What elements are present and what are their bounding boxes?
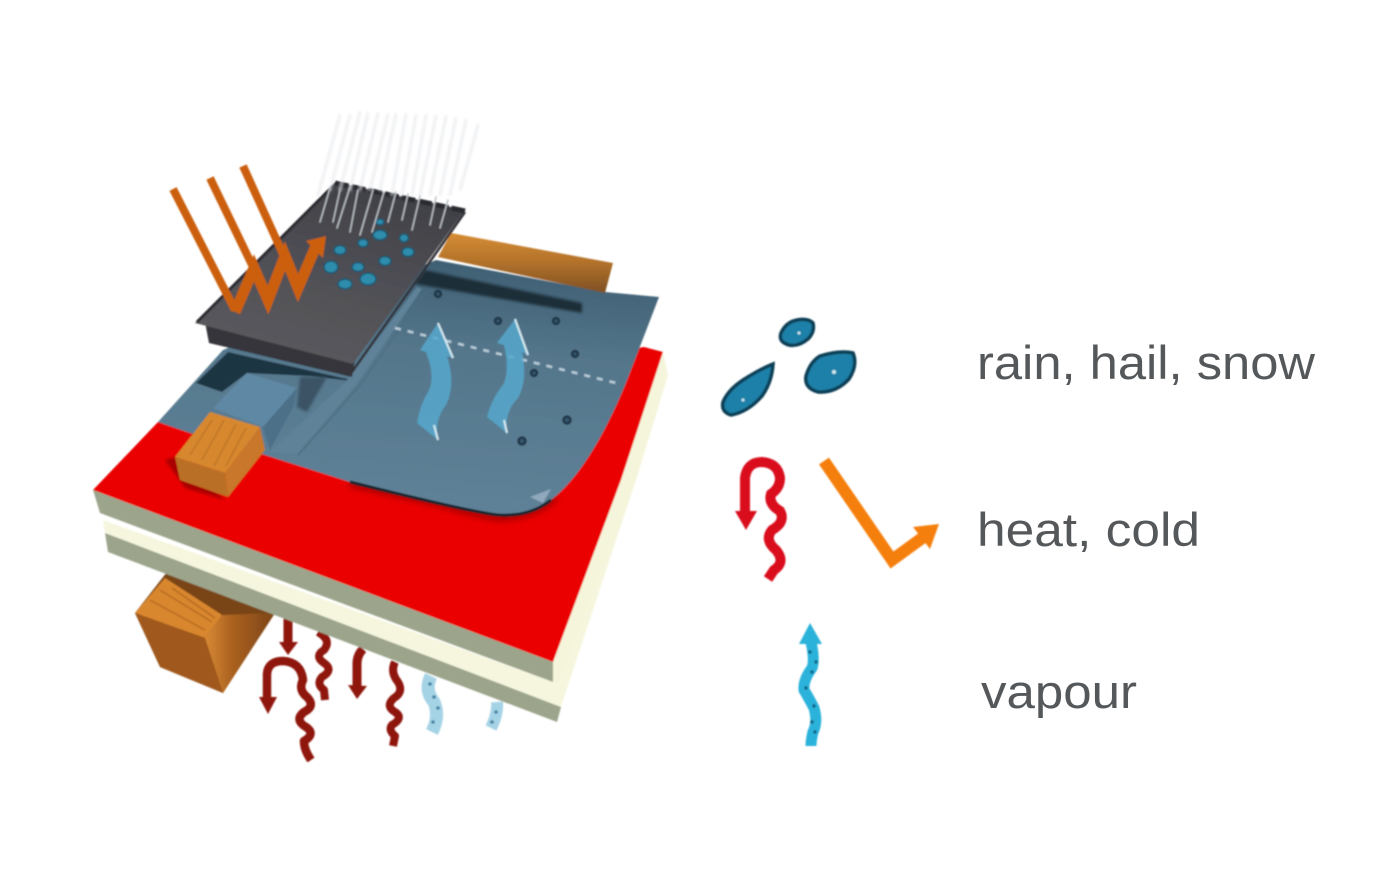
grey-blue roofing sheet xyxy=(158,260,659,515)
upstand shadow xyxy=(297,377,327,412)
rain streaks xyxy=(318,112,478,235)
batten under sheet xyxy=(213,373,297,427)
front timber batten xyxy=(165,412,265,500)
lower timber beam xyxy=(135,572,275,693)
dark shadow behind batten xyxy=(196,352,360,392)
lower insulation layer xyxy=(103,375,668,722)
droplets on sheet xyxy=(435,291,578,444)
vapour arrows on sheet xyxy=(417,319,528,440)
dashed seam xyxy=(395,328,620,384)
icon: blue vapour arrow xyxy=(799,623,822,746)
icon: water drops xyxy=(723,319,855,415)
sheet raised seam xyxy=(270,287,422,454)
label: vapour: vapour xyxy=(981,665,1137,718)
water droplets on panel xyxy=(324,219,414,289)
solar arrows xyxy=(173,166,326,312)
dark roofing panel xyxy=(195,182,465,377)
shadow under beam xyxy=(415,270,582,313)
red membrane xyxy=(93,347,663,662)
label: heat, cold: heat, cold xyxy=(977,503,1200,556)
icon: orange reflected arrow xyxy=(824,461,939,560)
legend: vapour xyxy=(799,623,1137,746)
rear timber beam xyxy=(438,233,613,293)
roof build-up illustration xyxy=(93,112,668,760)
label: rain, hail, snow: rain, hail, snow xyxy=(977,336,1316,389)
legend: heat, cold xyxy=(735,461,1200,579)
upper insulation layer xyxy=(93,352,668,685)
shadow beneath sheet edge xyxy=(350,484,556,518)
icon: red heat arrow xyxy=(735,462,782,579)
legend: rain, hail, snow xyxy=(723,319,1316,415)
vapour arrows below roof xyxy=(428,676,498,732)
heat arrows below roof xyxy=(259,618,400,760)
